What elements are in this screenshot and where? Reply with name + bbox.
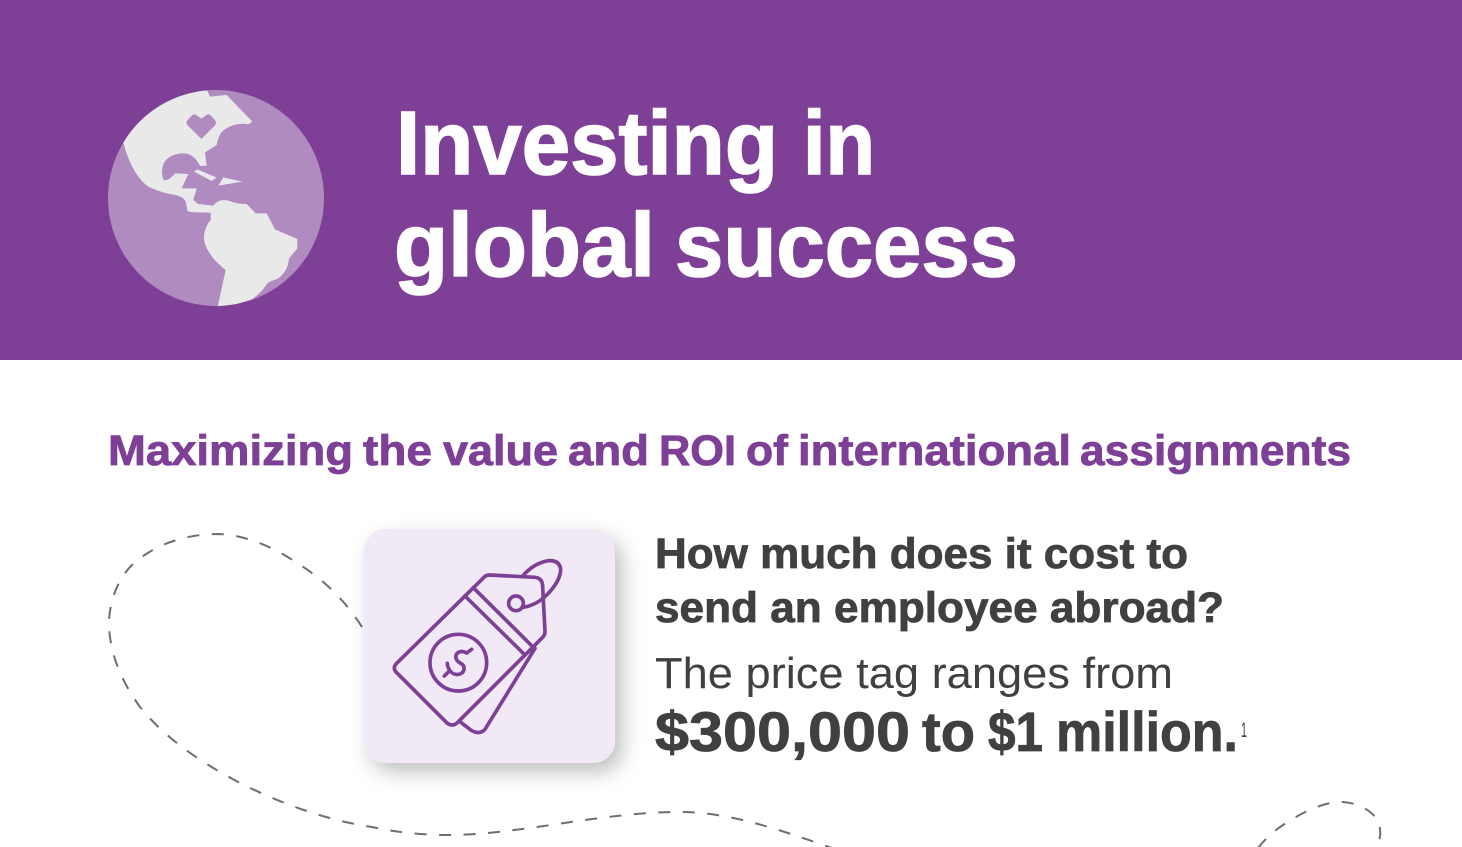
dashed path: left curve: [109, 534, 832, 847]
section heading: value: [443, 427, 558, 475]
title: [394, 94, 1018, 296]
panel: price tag card: [364, 529, 615, 763]
title: global: [394, 196, 655, 296]
section heading: of: [746, 427, 789, 475]
dashed path: right curve: [1258, 802, 1380, 847]
section heading: international: [798, 427, 1071, 475]
icon: price tags with dollar sign: [394, 561, 561, 733]
answer text: million.: [1056, 700, 1238, 763]
question text: send an employee abroad?: [655, 584, 1224, 632]
answer text: [655, 649, 1247, 763]
section heading: and: [568, 427, 649, 475]
section heading: Maximizing: [108, 427, 353, 475]
title: in: [803, 94, 875, 194]
answer text: 1: [1241, 719, 1247, 742]
answer text: $300,000: [655, 700, 910, 763]
section heading: ROI: [659, 427, 736, 475]
icon: globe: [108, 89, 324, 307]
title: success: [675, 196, 1018, 296]
answer text: $1: [988, 700, 1043, 763]
answer text: The price tag ranges from: [655, 649, 1173, 698]
title: Investing: [396, 94, 778, 194]
header banner: [0, 0, 1462, 360]
section heading: the: [363, 427, 432, 475]
section heading: assignments: [1080, 427, 1351, 475]
answer text: to: [922, 700, 975, 763]
section heading: [108, 427, 1351, 475]
question text: [655, 530, 1224, 632]
question text: How much does it cost to: [655, 530, 1188, 578]
